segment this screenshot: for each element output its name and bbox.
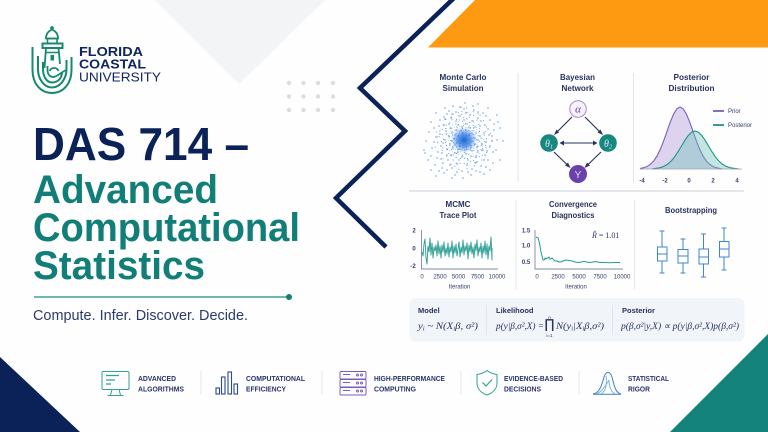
node Y: Y — [575, 170, 582, 181]
trace y labels: 2 — [412, 228, 416, 234]
heading: Bayesian — [560, 72, 595, 82]
convergence curve — [536, 237, 620, 263]
model formula: β, σ²) — [454, 321, 478, 332]
feature: computational efficiency — [216, 372, 306, 394]
heading — [440, 199, 477, 220]
density axis labels: 4 — [735, 178, 739, 184]
density axis labels: -4 — [639, 178, 645, 184]
R-hat label: R̂ = 1.01 — [591, 230, 619, 240]
panel: bootstrapping — [658, 205, 729, 277]
heading: Diagnostics — [552, 210, 595, 220]
label: DECISIONS — [504, 386, 541, 394]
convergence x labels: 0 — [535, 274, 539, 280]
background: navy corner — [0, 357, 80, 432]
icon: shield check — [477, 370, 497, 395]
trace y labels: 0 — [412, 246, 416, 252]
label — [138, 376, 184, 394]
posterior formula: Posterior — [622, 306, 655, 315]
heading — [560, 72, 595, 93]
background: grey triangle — [155, 0, 325, 84]
density legend — [713, 109, 752, 129]
footer dividers — [201, 371, 579, 395]
title: Computational — [33, 206, 300, 250]
label — [246, 376, 306, 394]
feature: advanced algorithms — [102, 372, 184, 396]
label: ALGORITHMS — [138, 386, 184, 394]
likelihood formula: i — [582, 326, 585, 332]
node theta 2 — [599, 134, 617, 152]
title: Advanced — [33, 168, 218, 212]
likelihood formula: N(y — [556, 322, 570, 332]
trace line — [422, 237, 492, 264]
density axis labels: 2 — [711, 178, 715, 184]
panel: formula strip — [409, 298, 744, 342]
scatter plot — [424, 100, 503, 179]
trace x labels: 2500 — [433, 274, 447, 280]
title: Statistics — [33, 244, 205, 288]
convergence y labels: 1.0 — [522, 244, 531, 250]
trace x labels: Iteration — [449, 284, 470, 290]
tagline: Compute. Infer. Discover. Decide. — [33, 307, 248, 324]
trace x labels: 5000 — [452, 274, 466, 280]
icon: bar chart — [216, 372, 238, 394]
trace x labels: 0 — [420, 274, 424, 280]
logo wordmark: UNIVERSITY — [79, 70, 162, 84]
logo wordmark: COASTAL — [79, 58, 146, 72]
likelihood formula: Likelihood — [496, 306, 534, 315]
node theta 1: θ — [545, 139, 550, 150]
node theta 2: 2 — [609, 144, 612, 150]
likelihood formula: i=1 — [546, 333, 553, 338]
heading: Bootstrapping — [665, 205, 717, 215]
title: DAS 714 – — [33, 118, 249, 170]
density chart — [640, 107, 742, 169]
icon: server rack — [340, 372, 366, 395]
heading — [440, 72, 486, 93]
title — [33, 118, 300, 288]
label: COMPUTING — [374, 386, 417, 394]
node alpha: α — [575, 104, 581, 116]
heading: MCMC — [446, 199, 470, 209]
background: dot grid — [287, 81, 335, 112]
heading: Distribution — [668, 83, 714, 93]
convergence x labels: Iteration — [565, 284, 587, 290]
convergence x labels: 10000 — [614, 274, 631, 280]
icon: bell curves — [593, 372, 621, 394]
heading — [668, 72, 714, 93]
model formula — [417, 306, 478, 332]
model formula: i — [453, 326, 455, 332]
heading: Network — [562, 83, 594, 93]
icon: lighthouse — [32, 27, 72, 93]
feature: evidence-based decisions — [477, 370, 563, 395]
heading: Simulation — [442, 83, 484, 93]
model formula: y — [418, 322, 422, 332]
feature: statistical rigor — [593, 372, 670, 394]
label: STATISTICAL — [628, 376, 670, 383]
heading — [549, 199, 597, 220]
node theta 1 — [540, 134, 558, 152]
density legend: Prior — [728, 109, 741, 115]
feature: high-performance computing — [340, 372, 445, 395]
likelihood formula: p(y|β,σ²,X) = — [495, 321, 544, 332]
likelihood formula: |X — [573, 322, 584, 332]
likelihood formula: n — [548, 315, 551, 320]
logo — [32, 27, 162, 93]
convergence x labels: 2500 — [551, 274, 565, 280]
label: COMPUTATIONAL — [246, 376, 306, 383]
model formula: ~ N(X — [425, 321, 455, 332]
panel dividers — [409, 73, 744, 289]
likelihood formula: ∏ — [544, 318, 554, 332]
posterior formula: p(β,σ²|y,X) ∝ p(y|β,σ²,X)p(β,σ²) — [620, 321, 739, 332]
trace x labels: 7500 — [471, 274, 485, 280]
label: EFFICIENCY — [246, 386, 286, 394]
model formula: Model — [418, 306, 440, 315]
likelihood formula — [495, 306, 604, 338]
logo wordmark — [79, 45, 162, 84]
box plots — [658, 228, 729, 277]
panel: Bayesian network — [540, 72, 617, 183]
panel: convergence diagnostics — [522, 199, 631, 290]
logo wordmark: FLORIDA — [79, 45, 143, 59]
node theta 1: 1 — [550, 144, 553, 150]
convergence y labels: 1.5 — [522, 228, 531, 234]
trace y labels: -2 — [410, 264, 416, 270]
likelihood formula: i — [571, 326, 573, 332]
panel: Monte Carlo simulation — [424, 72, 503, 179]
background: orange banner — [428, 0, 768, 48]
title rule with dot — [34, 294, 292, 300]
heading: Posterior — [674, 72, 710, 82]
convergence x labels: 5000 — [572, 274, 586, 280]
convergence x labels — [535, 274, 631, 290]
background: teal corner — [670, 334, 768, 432]
node theta 2: θ — [604, 139, 609, 150]
density axis labels: 0 — [687, 178, 691, 184]
trace axes — [422, 230, 498, 269]
density axis labels — [639, 178, 739, 184]
label: ADVANCED — [138, 376, 176, 383]
panel: posterior distribution — [639, 72, 752, 184]
convergence axes — [535, 230, 623, 269]
convergence y labels — [522, 228, 531, 266]
heading: Monte Carlo — [440, 72, 486, 82]
navy zigzag arrow — [336, 0, 454, 247]
heading: Trace Plot — [440, 210, 477, 220]
panel: MCMC trace plot — [410, 199, 506, 290]
convergence y labels: 0.5 — [522, 260, 531, 266]
density axis labels: -2 — [662, 178, 668, 184]
model formula: i — [423, 326, 425, 332]
label — [504, 376, 563, 394]
label: EVIDENCE-BASED — [504, 376, 563, 383]
network arrows — [554, 117, 603, 168]
label: HIGH-PERFORMANCE — [374, 376, 445, 383]
trace x labels — [420, 274, 506, 290]
trace y labels — [410, 228, 416, 270]
label — [374, 376, 445, 394]
label — [628, 376, 670, 394]
trace x labels: 10000 — [489, 274, 506, 280]
icon: monitor with code — [102, 372, 129, 396]
likelihood formula: β,σ²) — [583, 321, 604, 332]
density legend: Posterior — [728, 123, 752, 129]
convergence x labels: 7500 — [593, 274, 607, 280]
posterior formula — [620, 306, 739, 332]
label: RIGOR — [628, 386, 650, 394]
heading: Convergence — [549, 199, 597, 209]
